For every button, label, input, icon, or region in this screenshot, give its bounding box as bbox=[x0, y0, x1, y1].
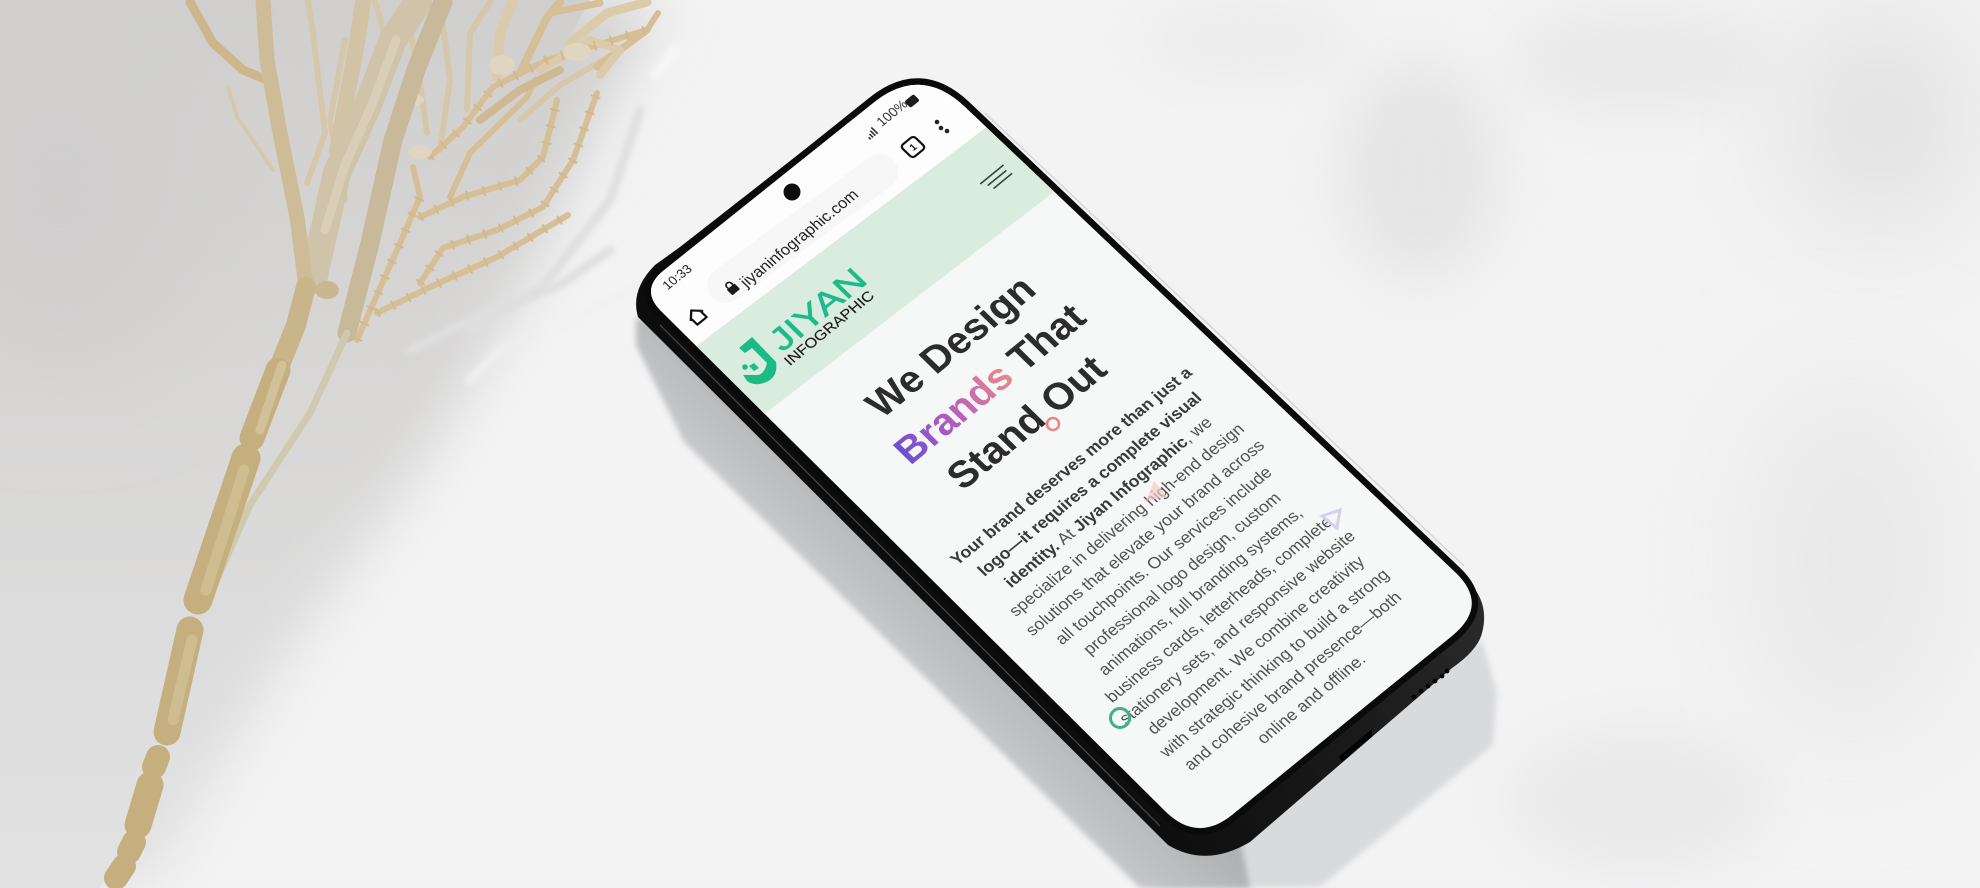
body paragraph bbox=[947, 363, 1405, 774]
status time: 10:33 bbox=[659, 261, 695, 293]
body paragraph: all touchpoints. Our services include bbox=[1051, 463, 1276, 648]
body paragraph: professional logo design, custom bbox=[1079, 489, 1285, 658]
website header band bbox=[696, 128, 1054, 414]
body paragraph: solutions that elevate your brand across bbox=[1022, 436, 1268, 639]
body paragraph: with strategic thinking to build a strong bbox=[1155, 565, 1393, 761]
plant: left side twig bbox=[190, 2, 267, 80]
body paragraph: animations, full branding systems, bbox=[1094, 504, 1307, 679]
body paragraph: and cohesive brand presence—both bbox=[1180, 588, 1405, 774]
dried plant branch bbox=[116, 2, 658, 878]
body paragraph: business cards, letterheads, complete bbox=[1101, 513, 1336, 706]
body paragraph: stationery sets, and responsive website bbox=[1115, 527, 1359, 728]
decorative red circle bbox=[1047, 418, 1059, 430]
camera punch hole bbox=[784, 184, 800, 200]
url pill bbox=[725, 172, 880, 285]
home icon bbox=[685, 305, 708, 326]
status battery percent: 100% bbox=[873, 97, 911, 129]
logo wordmark JIYAN: JIYAN bbox=[761, 261, 874, 358]
headline word That: That bbox=[999, 296, 1095, 379]
plant: frayed clusters bbox=[317, 43, 591, 246]
decorative purple triangle bbox=[1322, 510, 1340, 528]
phone: speaker holes bbox=[1412, 669, 1449, 699]
body paragraph: identity. At Jiyan Infographic, we bbox=[1000, 413, 1216, 591]
logo bbox=[739, 261, 878, 384]
phone: charging port bbox=[1340, 731, 1371, 761]
plant: jointed lower stem bbox=[116, 365, 282, 878]
plant: fine twigs bbox=[357, 2, 658, 340]
url text: jiyaninfographic.com bbox=[736, 187, 862, 291]
tab count icon: 1 bbox=[908, 142, 920, 153]
hamburger menu icon bbox=[980, 165, 1012, 192]
headline gradient word: Brands bbox=[885, 355, 1022, 472]
body paragraph: logo—it requires a complete visual bbox=[974, 389, 1206, 580]
body paragraph: Your brand deserves more than just a bbox=[947, 363, 1196, 569]
plant: upper thick branches bbox=[263, 2, 443, 370]
signal bars icon bbox=[864, 127, 878, 140]
lock icon bbox=[723, 280, 740, 295]
decorative green circle bbox=[1110, 708, 1130, 728]
phone body bbox=[636, 83, 1484, 856]
plant: pale background twigs bbox=[307, 2, 620, 200]
phone: lower-left rim line bbox=[660, 325, 1160, 826]
browser menu dots bbox=[935, 120, 949, 133]
plant: twig thorns bbox=[357, 30, 647, 340]
phone: rim highlight bbox=[985, 113, 1464, 566]
tab count icon bbox=[900, 136, 926, 158]
body paragraph: specialize in delivering high-end design bbox=[1005, 420, 1248, 620]
body paragraph: development. We combine creativity bbox=[1143, 552, 1369, 738]
phone: glass bezel bbox=[651, 85, 1472, 828]
logo wordmark INFOGRAPHIC: INFOGRAPHIC bbox=[781, 288, 878, 369]
phone: chassis outline bbox=[636, 83, 1484, 856]
decorative pink triangle bbox=[1146, 481, 1167, 501]
headline bbox=[857, 268, 1116, 498]
plant: thin pale stem bbox=[212, 333, 347, 590]
phone cast shadow bbox=[636, 318, 1497, 888]
logo mark bbox=[739, 337, 776, 384]
plant: small pale twig bbox=[228, 87, 273, 170]
battery icon bbox=[904, 94, 920, 108]
phone screen bbox=[650, 84, 1472, 828]
headline line one: We Design bbox=[857, 268, 1045, 426]
body paragraph: online and offline. bbox=[1253, 650, 1370, 748]
browser bar background bbox=[651, 84, 993, 355]
headline line three: Stand Out bbox=[938, 348, 1116, 498]
plant cast shadows and highlights bbox=[410, 50, 675, 380]
screen background bbox=[651, 84, 1472, 828]
